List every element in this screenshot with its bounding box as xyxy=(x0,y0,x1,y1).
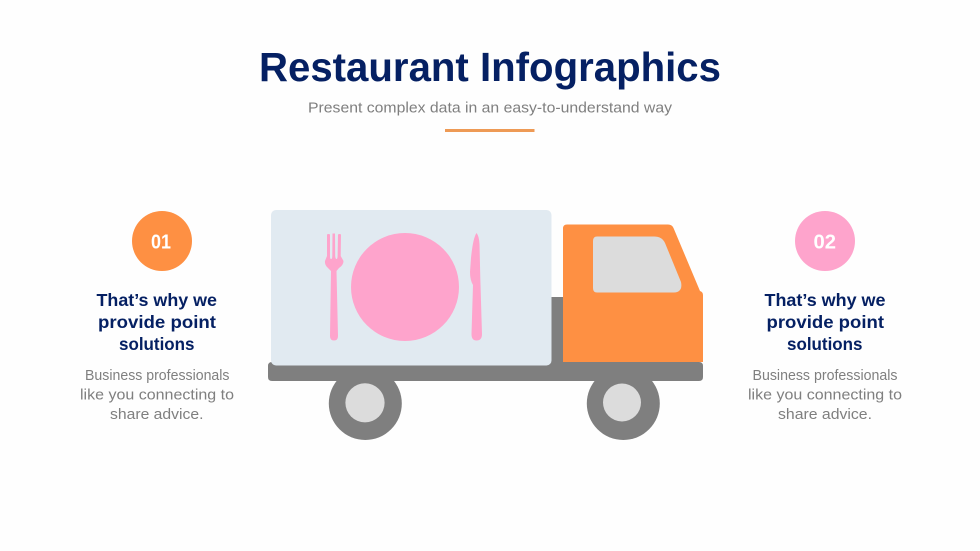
description 01: Business professionals xyxy=(85,368,230,384)
cab xyxy=(563,224,703,362)
panel: point 01 xyxy=(80,211,234,423)
icon: knife xyxy=(470,233,482,340)
heading 02: That’s why we xyxy=(764,290,886,310)
badge 01 xyxy=(132,211,192,271)
badge 02: 02 xyxy=(814,230,836,254)
description 01 xyxy=(80,368,234,423)
rear wheel xyxy=(329,367,402,440)
title underline xyxy=(445,129,534,132)
heading 01: provide point xyxy=(98,312,216,332)
description 02: share advice. xyxy=(778,407,872,423)
icon: plate xyxy=(351,233,459,341)
chassis xyxy=(268,297,703,381)
description 01: share advice. xyxy=(110,407,204,423)
front wheel xyxy=(587,367,660,440)
badge 01: 01 xyxy=(151,230,171,254)
title: Restaurant Infographics xyxy=(259,44,721,90)
panel: point 02 xyxy=(748,211,902,423)
description 02: Business professionals xyxy=(752,368,898,384)
description 02: like you connecting to xyxy=(748,388,902,404)
badge 02 xyxy=(795,211,855,271)
description 01: like you connecting to xyxy=(80,388,234,404)
cargo box xyxy=(271,210,552,366)
heading 02: provide point xyxy=(766,312,884,332)
heading 02: solutions xyxy=(787,334,863,354)
description 02 xyxy=(748,368,902,423)
cab window xyxy=(593,236,681,292)
heading 01 xyxy=(96,290,217,354)
heading 02 xyxy=(764,290,886,354)
heading 01: That’s why we xyxy=(96,290,217,310)
icon: fork xyxy=(325,234,344,340)
heading 01: solutions xyxy=(119,334,195,354)
truck illustration xyxy=(268,210,703,440)
subtitle: Present complex data in an easy-to-understand way xyxy=(308,100,673,116)
